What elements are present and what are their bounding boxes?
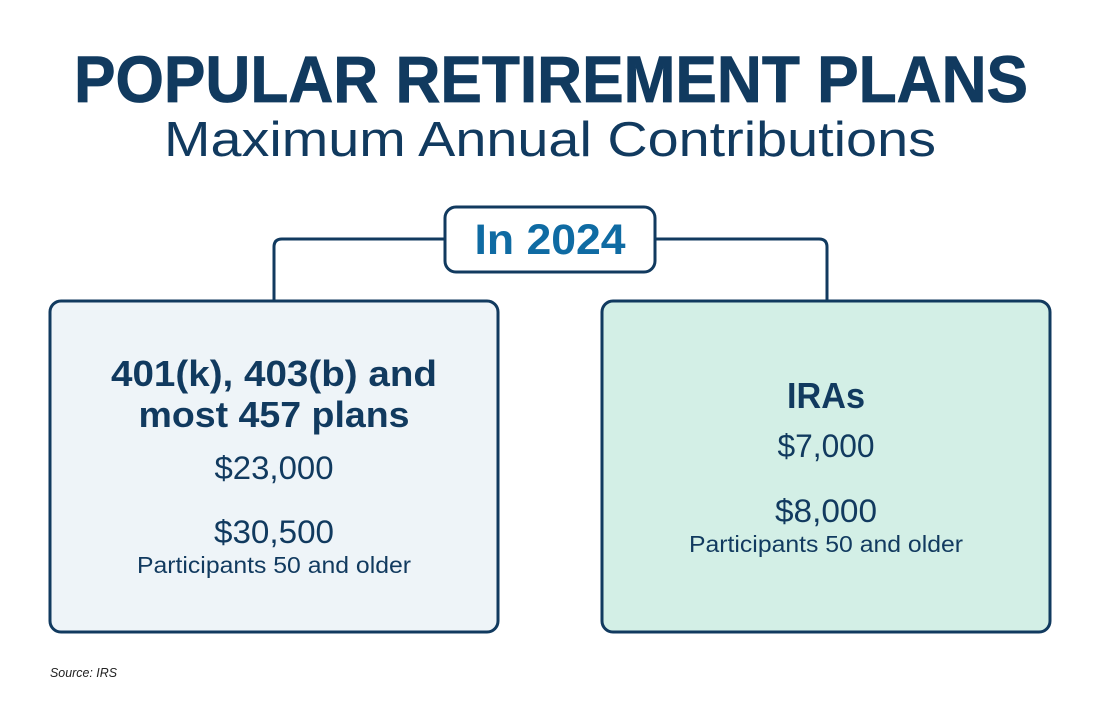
caption: Participants 50 and older [689, 531, 963, 557]
caption: Participants 50 and older [137, 552, 411, 578]
amount: 50 and older limit: $8,000 [775, 493, 877, 529]
amount: standard limit: $23,000 [214, 450, 334, 486]
panel heading [111, 353, 437, 435]
year badge [445, 207, 655, 272]
connector lines [274, 239, 827, 300]
subtitle: Maximum Annual Contributions [164, 113, 936, 167]
panel: IRAs [602, 301, 1050, 632]
panel: 401(k), 403(b) and most 457 plans [50, 301, 498, 632]
amount: 50 and older limit: $30,500 [214, 514, 334, 550]
title: POPULAR RETIREMENT PLANS [74, 42, 1028, 116]
amount: standard limit: $7,000 [778, 428, 874, 464]
source note: Source: IRS [50, 665, 117, 680]
panel heading: most 457 plans [138, 394, 410, 435]
panel heading: 401(k), 403(b) and [111, 353, 437, 394]
panel heading: IRAs [787, 375, 865, 416]
year badge: In 2024 [474, 216, 626, 264]
